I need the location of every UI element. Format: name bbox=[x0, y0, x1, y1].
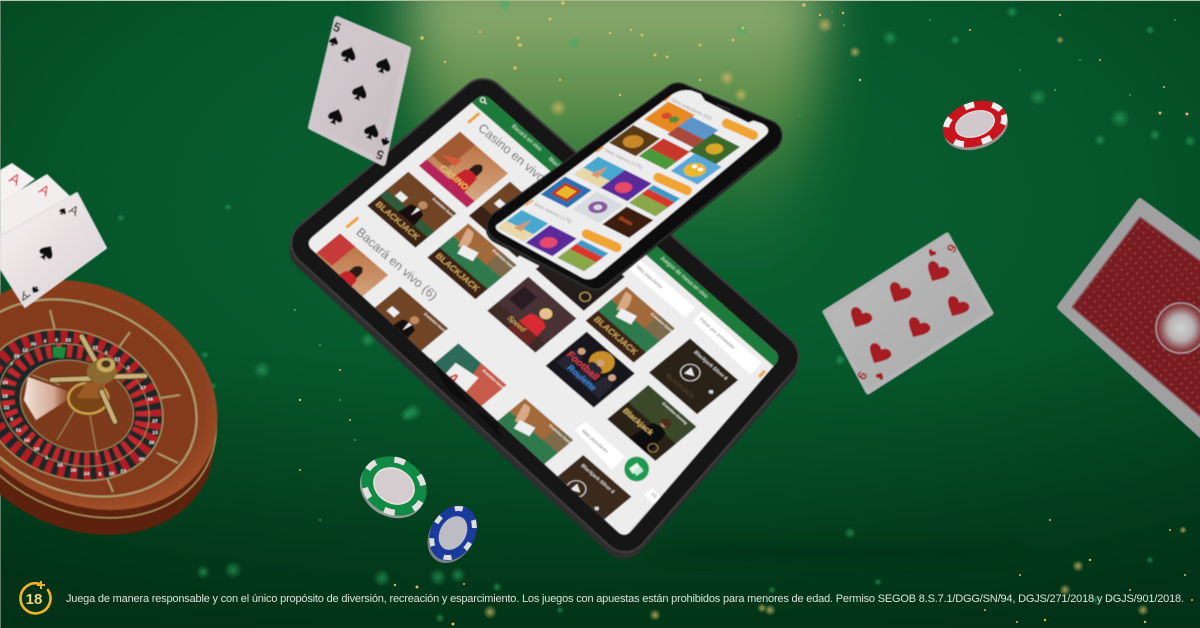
ace of spades front card bbox=[0, 193, 106, 307]
green chat button bbox=[624, 457, 649, 481]
pocket numbers: 12 bbox=[22, 347, 28, 353]
header labels: Juegos de mesa en vivo bbox=[659, 255, 709, 300]
thumbnail: card hand bbox=[434, 343, 507, 406]
pocket numbers: 20 bbox=[34, 447, 40, 453]
green header bar bbox=[471, 90, 785, 367]
phone screen bbox=[496, 90, 768, 279]
slot: red yellow grid bbox=[541, 177, 592, 208]
playing card: five of spades: 5 bbox=[331, 19, 343, 35]
pocket numbers: 34 bbox=[147, 397, 153, 403]
playing card: six of hearts: 6 bbox=[854, 369, 870, 383]
inner pockets bbox=[0, 333, 158, 477]
pocket numbers: 1 bbox=[45, 455, 48, 461]
playing cards: aces fan bbox=[0, 163, 106, 307]
slot: purple bbox=[601, 170, 652, 201]
tablet screen content bbox=[299, 90, 785, 532]
phone bbox=[496, 90, 768, 279]
playing card: red back bbox=[1060, 201, 1200, 443]
pocket numbers: 30 bbox=[139, 457, 145, 463]
pocket numbers: 4 bbox=[105, 350, 108, 356]
pocket numbers: 33 bbox=[57, 462, 63, 468]
pocket numbers: 29 bbox=[2, 380, 8, 386]
tablet bbox=[299, 90, 785, 535]
thumbnail: Blackjack dealer: BLACKJACK bbox=[373, 199, 423, 242]
pocket numbers: 2 bbox=[127, 365, 130, 371]
pocket numbers: 10 bbox=[109, 471, 115, 477]
horizontal floor shadow bbox=[640, 545, 1020, 561]
thumbnail: Blackjack Silver dark: Blackjack Silver 6 bbox=[692, 350, 729, 382]
age icon: 18+ bbox=[21, 581, 51, 613]
cone lines bbox=[32, 375, 97, 455]
pocket numbers: 14 bbox=[24, 438, 30, 444]
pocket numbers: 36 bbox=[149, 440, 155, 446]
phone bezel bbox=[502, 98, 767, 274]
thumbnail: Roulette blonde bbox=[487, 277, 576, 353]
slot: yellow monster bbox=[671, 153, 722, 185]
pocket numbers: 35 bbox=[31, 342, 36, 348]
filter: Filtrar por proveedor: Filtrar por proveedor bbox=[698, 317, 736, 351]
thumbnail: Blackjack hands bbox=[427, 223, 520, 302]
phone screen content bbox=[497, 96, 760, 271]
pocket numbers: 9 bbox=[10, 417, 13, 423]
orange button two bbox=[652, 171, 693, 197]
filter: Mas populares bbox=[627, 258, 695, 317]
green zero pocket bbox=[53, 347, 66, 358]
phone rim bbox=[502, 98, 767, 274]
tablet and phone drawn in zoomed coordinates bbox=[299, 90, 785, 535]
title: Casino en vivo: Casino en vivo (7) bbox=[475, 121, 563, 197]
thumbnail: Football Roulette bbox=[546, 332, 635, 408]
filter: Mas populares lower: Más populares bbox=[580, 429, 609, 455]
thumbnail: Blackjack dealer: Evolution Gaming bbox=[431, 197, 458, 221]
ace of hearts middle card bbox=[0, 174, 72, 245]
filter: Filtrar por proveedor bbox=[693, 311, 762, 375]
ace of spades front card: A bbox=[17, 288, 32, 305]
chip: red bbox=[937, 93, 1014, 158]
chip: green bbox=[349, 445, 437, 530]
thumbnail: Blackjack Silver dark: BLACKJACK bbox=[664, 373, 695, 400]
orange marks bbox=[526, 96, 670, 205]
thumbnail: Blackjack hands: Evolution Gaming bbox=[491, 249, 518, 272]
slot: market two bbox=[557, 240, 608, 271]
tablet screen bbox=[309, 96, 778, 535]
thumbnail: card hand: A bbox=[442, 370, 463, 388]
pocket numbers: 31 bbox=[16, 428, 21, 434]
header labels bbox=[510, 124, 709, 300]
ace of diamonds back card bbox=[0, 163, 35, 205]
thumbnail: Bacara woman bbox=[316, 233, 388, 297]
search icon bbox=[480, 98, 487, 104]
slot: red green bbox=[639, 138, 690, 170]
thumbnail: Blackjack woman: Blackjack bbox=[621, 407, 656, 437]
thumbnail: dealer two: Evolution Gaming bbox=[423, 312, 450, 336]
thumbnail: Blackjack dealer bbox=[367, 172, 460, 251]
playing card: six of hearts: 6 bbox=[944, 241, 960, 255]
slot: mountain bbox=[667, 117, 718, 148]
title: Bacara en vivo: Bacará en vivo (6) bbox=[353, 225, 440, 303]
tablet side lip bbox=[313, 108, 774, 535]
ace of diamonds back card: A bbox=[6, 170, 23, 189]
phone section labels: Slots nuevos (175) bbox=[603, 147, 643, 171]
filter: Mas populares lower bbox=[575, 422, 625, 470]
legal disclaimer: Juega de manera responsable y con el único propósito de diversión, recreación y esparcimiento. Los juegos con apuestas están prohibidos para menores de edad. Permiso SEGOB 8.S.7.1/DGG/SN/94, DGJS/271/2018 y DGJS/901/2018. bbox=[66, 593, 1184, 605]
thumbnail: Blackjack hands right bbox=[586, 287, 678, 366]
pocket numbers: 15 bbox=[92, 345, 98, 351]
filter: Fil bbox=[644, 488, 662, 504]
pocket numbers: 32 bbox=[66, 338, 71, 344]
slot: market bbox=[629, 185, 680, 216]
phone side lip bbox=[501, 101, 766, 277]
thumbnail: card hand: Evolution Gaming bbox=[481, 369, 508, 392]
wood dividers bbox=[50, 310, 180, 492]
slot: beach two bbox=[497, 210, 548, 241]
thumbnail: bottom hands: Evolution Gaming bbox=[548, 424, 575, 447]
pocket divider ring bbox=[0, 323, 167, 487]
thumbnail: Football Roulette: Football bbox=[564, 350, 602, 383]
thumbnail: Blackjack Silver bottom bbox=[557, 454, 632, 520]
tablet bezel reflection bbox=[430, 357, 502, 438]
pocket numbers: 27 bbox=[152, 418, 158, 424]
slot: orange kids bbox=[644, 102, 695, 133]
header labels: Blackjack bbox=[547, 156, 569, 177]
slot: dark red bbox=[602, 207, 653, 238]
playing card: five of spades: 5 bbox=[374, 147, 386, 163]
filter: Fil: Fil bbox=[650, 492, 658, 500]
thumbnail: Blackjack hands: BLACKJACK bbox=[433, 251, 483, 294]
thumbnail: Blackjack hands right: Evolution Gaming bbox=[650, 312, 677, 336]
phone section labels: Slots populares (50) bbox=[670, 97, 713, 122]
phone speaker bbox=[717, 105, 730, 110]
slot: beach bbox=[574, 157, 625, 188]
base gold trim bbox=[0, 244, 256, 562]
cone bbox=[7, 345, 147, 467]
pocket numbers bbox=[2, 337, 158, 478]
spindle bbox=[52, 337, 145, 422]
spotlight beam from top bbox=[405, 0, 825, 270]
slot: brown gold bbox=[609, 125, 660, 156]
ace of spades front card: A bbox=[66, 202, 82, 219]
scrollbars bbox=[632, 406, 740, 528]
pocket numbers: 17 bbox=[141, 385, 146, 391]
thumbnail: dealer two bbox=[374, 286, 448, 352]
cone highlight bbox=[24, 377, 70, 420]
pocket numbers: 0 bbox=[55, 338, 58, 344]
thumbnail: Blackjack woman bbox=[607, 385, 696, 461]
orange button one bbox=[720, 117, 760, 141]
slot: dark red: Slots bbox=[616, 216, 634, 227]
play icon bbox=[679, 363, 702, 382]
playing card: five of spades bbox=[311, 19, 408, 163]
pocket numbers: 5 bbox=[99, 472, 102, 478]
thumbnail: Casino woman: CASINO bbox=[438, 163, 471, 192]
thumbnail: Casino woman bbox=[419, 132, 508, 208]
thumbnail: Blackjack woman: Evolution Gaming bbox=[661, 402, 688, 425]
orange title marks bbox=[347, 114, 764, 376]
pocket numbers: 23 bbox=[121, 468, 126, 474]
thumbnail: bottom hands bbox=[497, 398, 574, 465]
header labels: Bacará en vivo bbox=[510, 124, 543, 153]
tablet rim bbox=[314, 102, 776, 529]
slot: green bbox=[689, 133, 740, 165]
slot: circular bbox=[572, 192, 623, 223]
phone section labels: Slots nuevos (175) bbox=[532, 201, 573, 225]
thumbnail: Blackjack Silver bottom: Blackjack Silver 6 bbox=[579, 463, 616, 495]
orange button three bbox=[580, 228, 623, 254]
pocket numbers: 3 bbox=[44, 338, 47, 344]
pocket numbers: 21 bbox=[115, 357, 120, 363]
thumbnail: Blackjack hands right: BLACKJACK bbox=[592, 314, 641, 357]
slot: purple two bbox=[526, 225, 577, 256]
thumbnail: Blackjack Silver dark bbox=[649, 338, 738, 414]
pocket numbers: 16 bbox=[71, 468, 76, 474]
pocket numbers: 28 bbox=[14, 353, 20, 359]
pocket numbers: 24 bbox=[84, 471, 90, 477]
thumbnail: Roulette blonde: Speed bbox=[505, 314, 529, 334]
wood rim bbox=[0, 236, 257, 554]
pocket numbers: 22 bbox=[4, 405, 10, 411]
age icon: 18+: 18 bbox=[26, 591, 42, 608]
tablet bezel bbox=[314, 102, 776, 529]
thumbnail: small Blackjack under phone bbox=[468, 181, 522, 258]
thumbnail: Football Roulette: Roulette bbox=[565, 363, 599, 392]
outer gold ring bbox=[0, 263, 228, 533]
wheel base bbox=[0, 261, 254, 579]
outer pockets bbox=[0, 314, 174, 496]
chip: blue bbox=[418, 497, 487, 572]
pocket numbers: 13 bbox=[152, 430, 158, 436]
ace of hearts middle card: A bbox=[36, 181, 53, 200]
pocket numbers: 18 bbox=[2, 393, 8, 399]
filter: Mas populares: Más populares bbox=[635, 264, 664, 291]
pocket numbers: 7 bbox=[10, 362, 13, 368]
roulette wheel bbox=[0, 236, 257, 579]
number track bbox=[0, 305, 184, 505]
playing card: six of hearts bbox=[825, 235, 991, 392]
thumbnail behind phone bbox=[535, 265, 626, 312]
phone section labels bbox=[532, 97, 713, 225]
